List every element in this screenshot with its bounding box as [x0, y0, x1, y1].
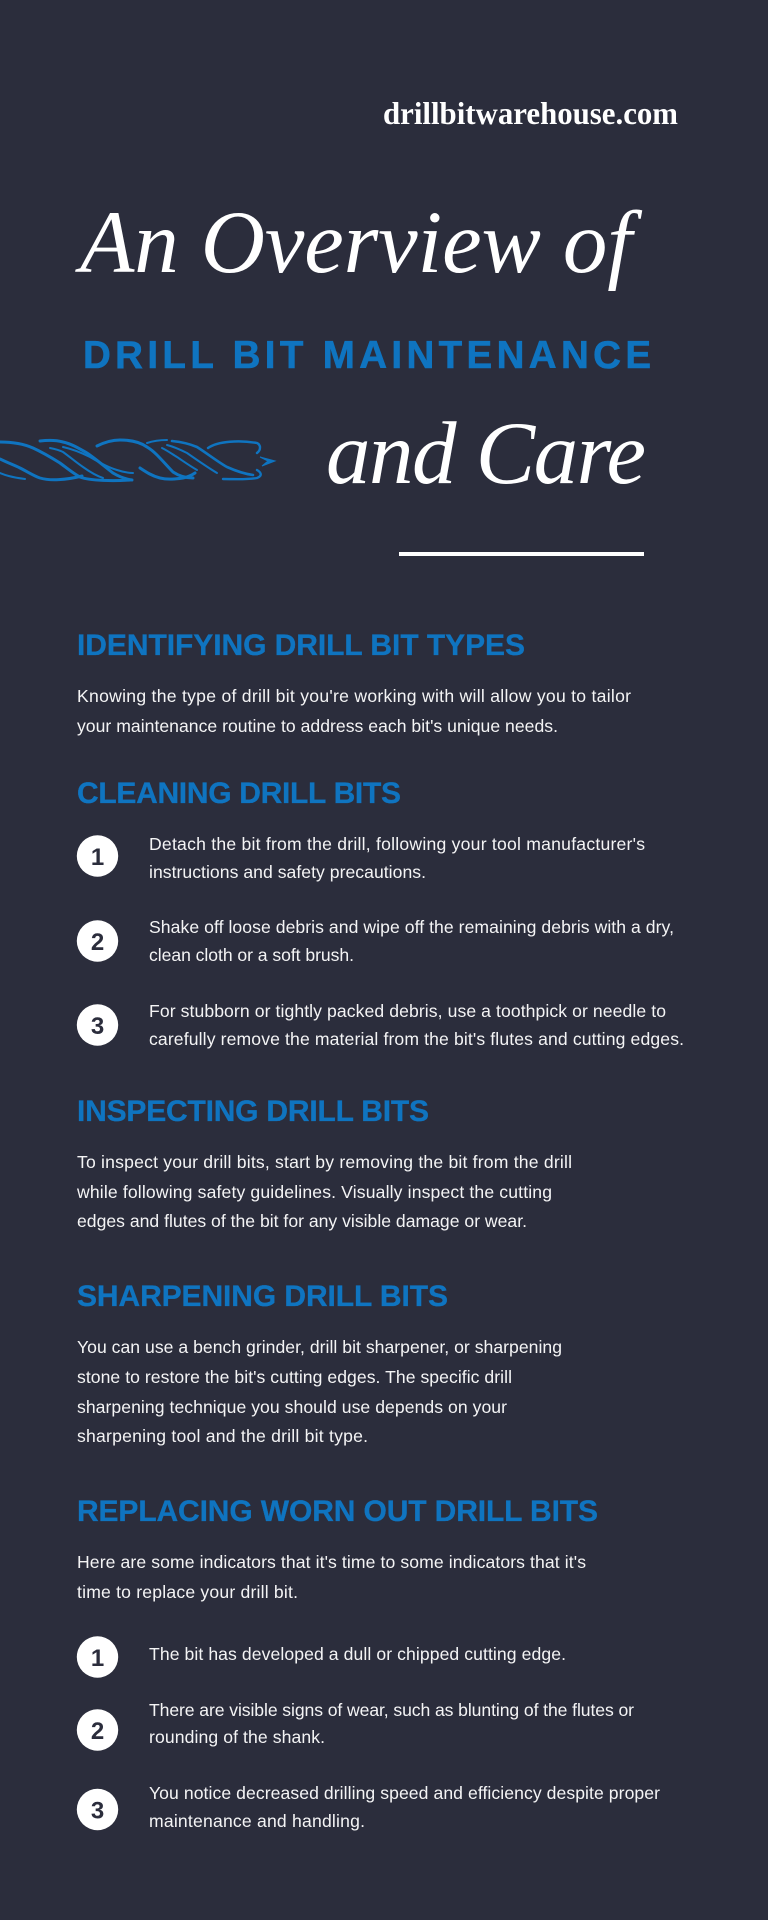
indicator 3: 3 — [91, 1798, 104, 1824]
indicator 1 — [77, 1636, 566, 1678]
indicator 3: maintenance and handling. — [149, 1811, 365, 1831]
intro text — [77, 1552, 586, 1602]
title: An Overview of: An Overview of — [75, 194, 642, 292]
section: inspecting drill bits — [76, 1095, 572, 1231]
heading: IDENTIFYING DRILL BIT TYPES — [77, 629, 525, 662]
body text: edges and flutes of the bit for any visible damage or wear. — [77, 1211, 527, 1231]
body text — [76, 1152, 572, 1231]
step 3: For stubborn or tightly packed debris, use a toothpick or needle to — [149, 1001, 666, 1021]
intro text: time to replace your drill bit. — [77, 1582, 298, 1602]
title: and Care: and Care — [326, 405, 646, 503]
body text — [77, 1337, 562, 1446]
body text: while following safety guidelines. Visually inspect the cutting — [76, 1182, 552, 1202]
indicator 2: rounding of the shank. — [149, 1727, 325, 1747]
step 2 — [77, 917, 674, 965]
step 2: 2 — [91, 929, 104, 956]
section: replacing worn out drill bits — [77, 1495, 660, 1831]
body text: Knowing the type of drill bit you're working with will allow you to tailor — [77, 686, 631, 706]
title underline — [399, 552, 644, 556]
step 3: carefully remove the material from the bit's flutes and cutting edges. — [149, 1029, 684, 1049]
step 2: Shake off loose debris and wipe off the remaining debris with a dry, — [149, 917, 674, 937]
body text: To inspect your drill bits, start by removing the bit from the drill — [77, 1152, 572, 1172]
body text — [77, 686, 631, 736]
step 3: 3 — [91, 1013, 104, 1040]
indicator 1: 1 — [91, 1645, 104, 1672]
section: sharpening drill bits — [77, 1280, 562, 1446]
heading: SHARPENING DRILL BITS — [77, 1280, 448, 1313]
indicator 2: There are visible signs of wear, such as blunting of the flutes or — [149, 1700, 634, 1720]
step 1: instructions and safety precautions. — [149, 862, 426, 882]
step 1 — [77, 834, 645, 882]
intro text: Here are some indicators that it's time to some indicators that it's — [77, 1552, 586, 1572]
indicator 2: 2 — [91, 1718, 104, 1745]
heading: INSPECTING DRILL BITS — [77, 1095, 429, 1128]
indicator 3: You notice decreased drilling speed and efficiency despite proper — [149, 1783, 660, 1803]
website url: drillbitwarehouse.com — [383, 96, 678, 131]
body text: your maintenance routine to address each bit's unique needs. — [77, 716, 558, 736]
indicator 2 — [77, 1700, 634, 1751]
icon: drill bit — [0, 440, 275, 481]
body text: stone to restore the bit's cutting edges. The specific drill — [77, 1367, 512, 1387]
section: cleaning drill bits — [77, 777, 684, 1049]
title: Drill Bit Maintenance: DRILL BIT MAINTENANCE — [83, 334, 651, 377]
body text: You can use a bench grinder, drill bit sharpener, or sharpening — [77, 1337, 562, 1357]
step 3 — [77, 1001, 684, 1049]
step 2: clean cloth or a soft brush. — [149, 945, 354, 965]
indicator 1: The bit has developed a dull or chipped cutting edge. — [149, 1644, 566, 1664]
body text: sharpening technique you should use depends on your — [77, 1397, 507, 1417]
indicator 3 — [77, 1783, 660, 1831]
heading: REPLACING WORN OUT DRILL BITS — [77, 1495, 598, 1528]
section: identifying drill bit types — [77, 629, 631, 736]
body text: sharpening tool and the drill bit type. — [77, 1426, 368, 1446]
step 1: Detach the bit from the drill, following your tool manufacturer's — [149, 834, 645, 854]
step 1: 1 — [91, 844, 104, 871]
heading: CLEANING DRILL BITS — [77, 777, 401, 810]
